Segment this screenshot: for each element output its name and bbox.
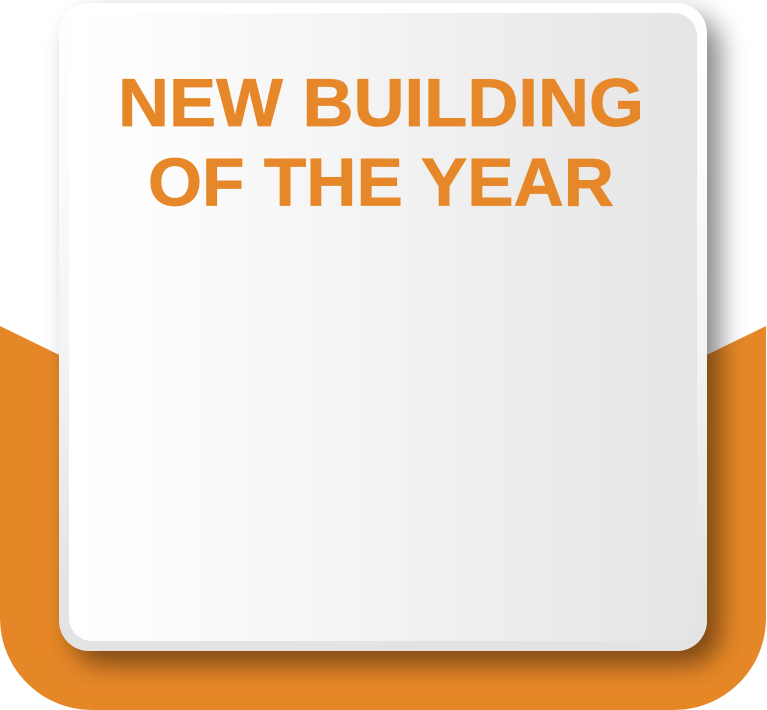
orange backing shape	[0, 326, 766, 710]
card frame	[59, 3, 707, 651]
title line 1: NEW BUILDING	[118, 65, 644, 141]
card face	[69, 13, 697, 641]
title	[118, 65, 644, 220]
card shadow	[72, 16, 720, 664]
card	[59, 3, 707, 651]
title line 2: OF THE YEAR	[148, 144, 614, 220]
